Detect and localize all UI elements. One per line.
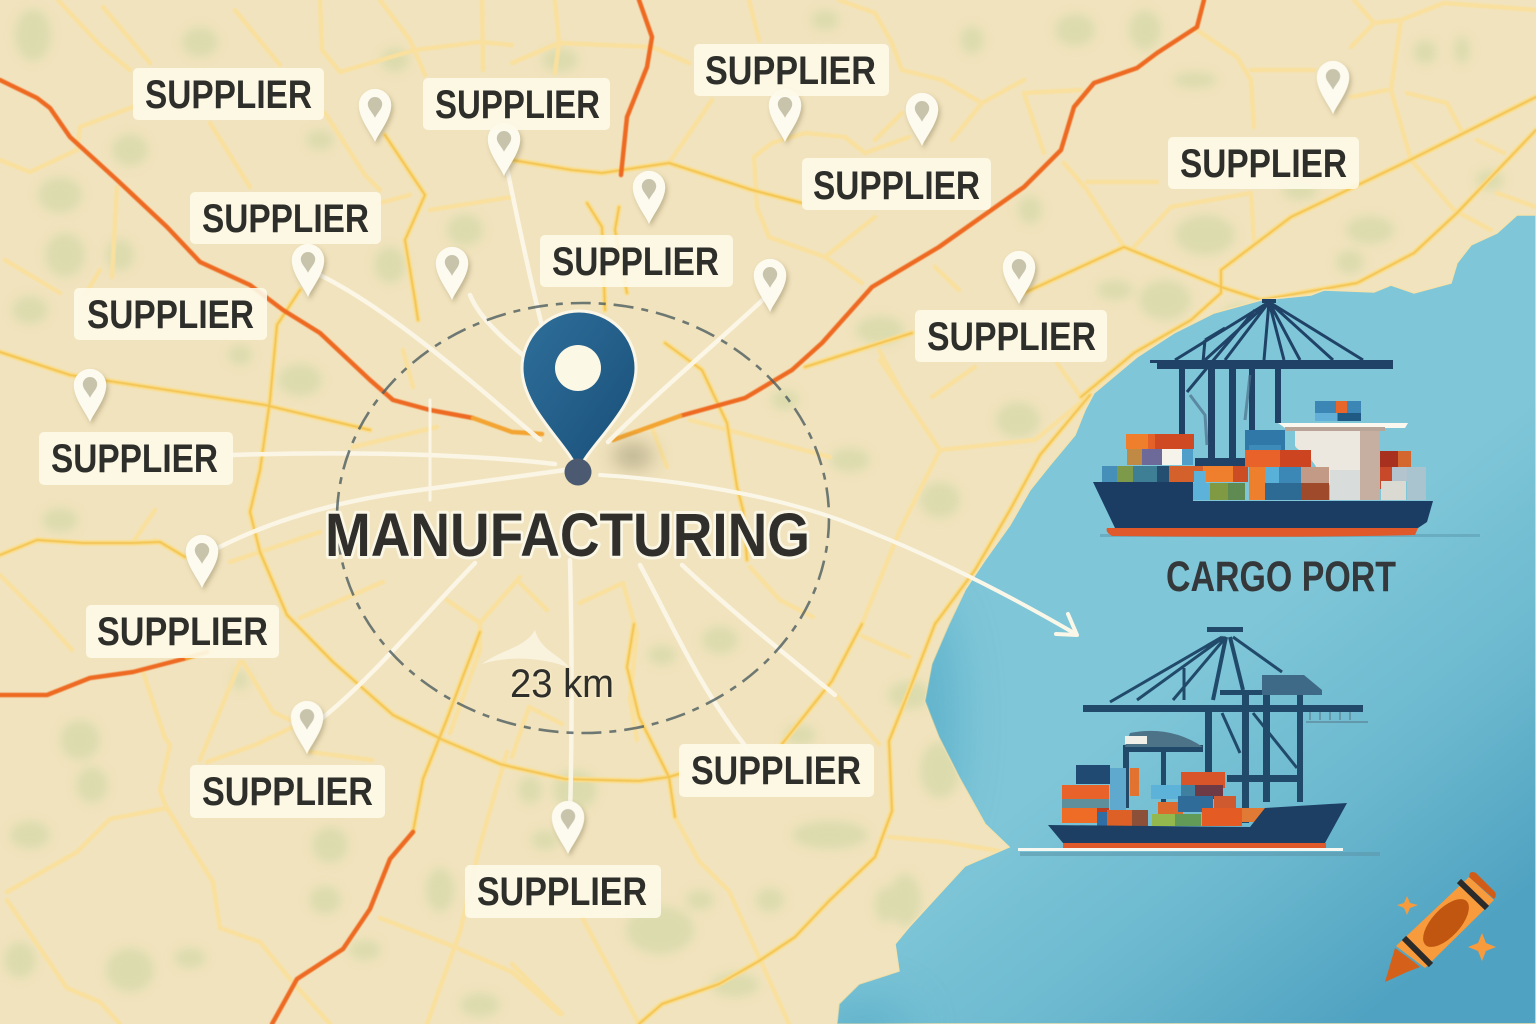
supplier labels: SUPPLIER [691,749,861,793]
supplier labels: SUPPLIER [145,73,312,117]
supplier labels: SUPPLIER [87,293,254,337]
hull [1048,803,1347,843]
distance label: 23 km [510,662,614,706]
cargo ship with crane, upper [1093,299,1480,537]
crayon logo [1385,872,1496,982]
supplier labels: SUPPLIER [97,610,268,654]
cargo ship with crane, lower [1018,627,1380,856]
sea and coastline [810,215,1536,1024]
containers [1076,765,1110,784]
supplier labels: SUPPLIER [927,315,1096,359]
arrow to cargo port [600,475,1077,635]
supplier labels: SUPPLIER [705,49,876,93]
containers [1126,434,1194,449]
supplier labels: SUPPLIER [202,197,369,241]
title: manufacturing: MANUFACTURING [325,501,810,569]
supplier labels: SUPPLIER [202,770,373,814]
supplier labels: SUPPLIER [51,437,218,481]
small curl near distance label [482,630,570,668]
superstructure [1295,430,1380,500]
main location pin [522,311,636,486]
supplier labels [39,44,1359,918]
shaded blur near pin [613,444,653,468]
cargo port label: CARGO PORT [1166,553,1396,601]
supply routes to manufacturing [210,150,835,815]
hull [1093,482,1433,528]
supplier pins [74,61,1349,854]
supplier labels: SUPPLIER [435,83,600,127]
supplier labels: SUPPLIER [552,240,719,284]
supplier labels: SUPPLIER [813,164,980,208]
supplier labels: SUPPLIER [477,870,647,914]
distance radius circle [337,303,829,733]
orange highways [0,0,1204,1024]
supplier labels: SUPPLIER [1180,142,1347,186]
